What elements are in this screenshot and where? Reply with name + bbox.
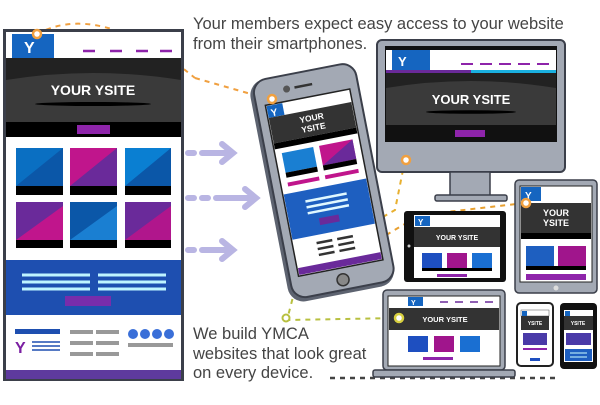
laptop device: YOUR YSITE — [422, 315, 468, 324]
title text: top: Your members expect easy access to your website — [193, 15, 564, 33]
icon: orange dot on phone — [268, 95, 276, 103]
icon: orange dot on tablet — [522, 199, 530, 207]
icon: yellow dot bottom — [282, 314, 290, 322]
monitor device: YOUR YSITE — [432, 92, 511, 107]
tablet portrait device: Y — [525, 191, 532, 202]
small phone white — [517, 303, 553, 366]
text: from their smartphones. — [193, 35, 367, 53]
small phone black — [560, 303, 597, 369]
phone device: Y — [270, 107, 279, 119]
small phone black: YSITE — [571, 321, 586, 327]
panel: desktop website mockup — [3, 29, 184, 381]
tablet portrait device: YOUR — [543, 208, 569, 218]
phone device: YOUR — [299, 111, 325, 125]
laptop device: Y — [411, 300, 416, 307]
tablet landscape device: YOUR YSITE — [436, 235, 478, 242]
monitor device — [377, 40, 565, 201]
tablet landscape device: Y — [418, 218, 424, 227]
phone device: YSITE — [300, 120, 327, 135]
panel: desktop website mockup: Y — [24, 40, 35, 57]
tablet portrait device — [515, 180, 597, 293]
text: websites that look great — [192, 345, 367, 363]
icon: orange dot on desktop mockup — [33, 30, 41, 38]
dashed connector lines — [37, 24, 560, 378]
panel: desktop website mockup: Y — [15, 340, 26, 357]
text: bottom: We build YMCA — [193, 325, 309, 343]
phone device — [248, 62, 397, 304]
tablet landscape device — [404, 211, 506, 282]
monitor device: Y — [398, 54, 407, 69]
tablet portrait device: YSITE — [543, 218, 569, 228]
icon: orange dot on monitor — [402, 156, 410, 164]
panel: desktop website mockup: YOUR YSITE — [51, 82, 135, 98]
small phone white: YSITE — [528, 321, 543, 327]
arrows: desktop to phone — [188, 144, 256, 259]
icon: yellow dot on laptop — [395, 314, 403, 322]
text: on every device. — [193, 364, 313, 382]
laptop device — [373, 290, 515, 377]
